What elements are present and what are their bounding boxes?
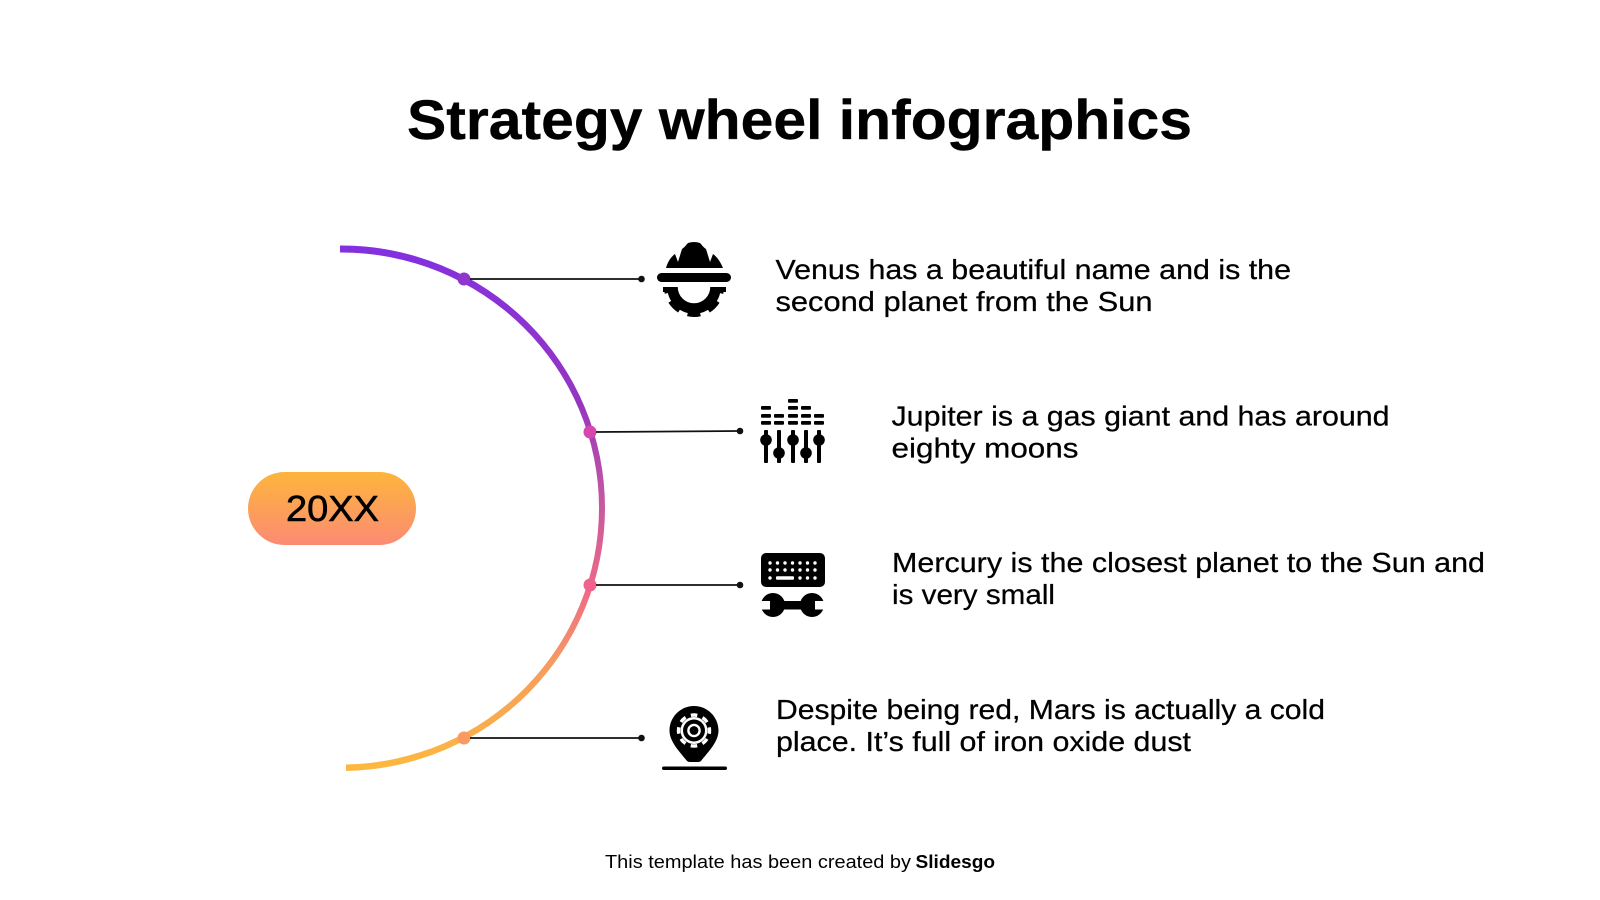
- footer credit: This template has been created by: [605, 852, 911, 872]
- text: Jupiter: Jupiter is a gas giant and has around: [892, 400, 1390, 432]
- footer credit: Slidesgo: [916, 852, 995, 872]
- text: Mercury: is very small: [892, 579, 1055, 610]
- icon: keyboard and wrench: [758, 553, 827, 617]
- text: Venus: second planet from the Sun: [776, 286, 1152, 317]
- text: Jupiter: [892, 400, 1390, 464]
- text: Mercury: Mercury is the closest planet to the Sun and: [892, 547, 1485, 578]
- text: Mars: [776, 694, 1325, 757]
- text: Mars: place. It’s full of iron oxide dust: [776, 726, 1191, 757]
- node: Venus: [458, 272, 470, 286]
- strategy wheel arc: [340, 245, 605, 771]
- icon: location pin with gear: [662, 706, 727, 770]
- text: Venus: [776, 254, 1291, 317]
- title: Strategy wheel infographics: [407, 88, 1192, 151]
- year label: 20XX: [286, 488, 379, 529]
- node: Jupiter: [584, 426, 596, 438]
- year pill: [248, 472, 416, 545]
- connector: Jupiter: [596, 428, 743, 434]
- text: Mars: Despite being red, Mars is actually a cold: [776, 694, 1325, 725]
- text: Venus: Venus has a beautiful name and is the: [776, 254, 1291, 285]
- icon: helmet with gear: [657, 242, 731, 315]
- connector: Mars: [470, 735, 645, 741]
- connector: Mercury: [596, 582, 743, 588]
- icon: equalizer sliders: [760, 399, 825, 463]
- connector: Venus: [470, 276, 645, 282]
- text: Jupiter: eighty moons: [892, 432, 1078, 464]
- node: Mars: [458, 732, 470, 744]
- text: Mercury: [892, 547, 1485, 610]
- node: Mercury: [584, 578, 596, 592]
